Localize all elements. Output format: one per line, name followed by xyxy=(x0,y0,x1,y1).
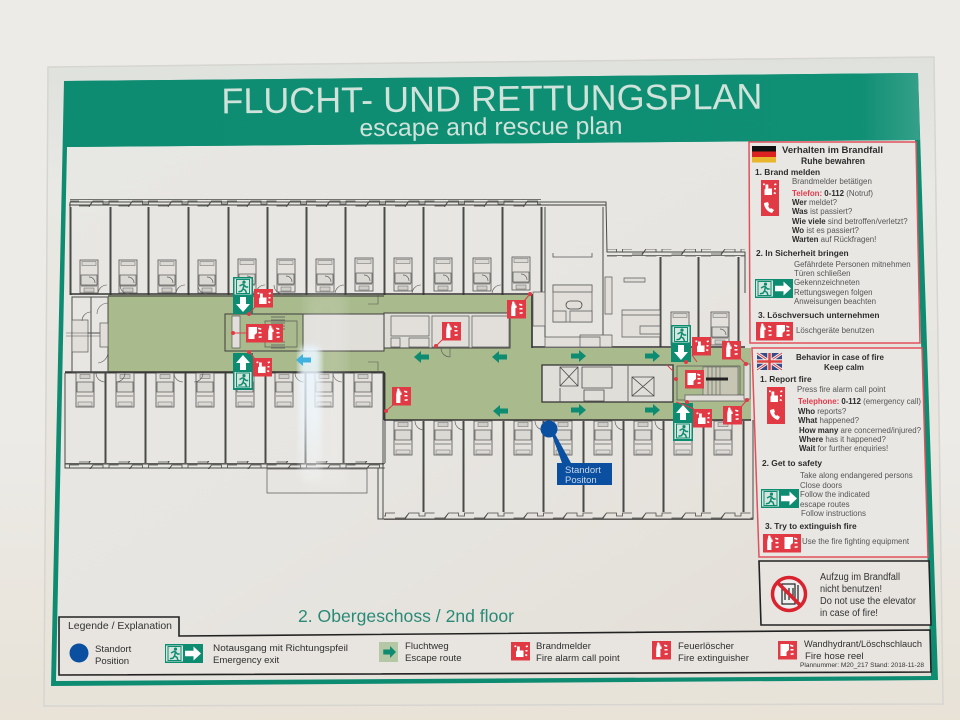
panel: English fire instructions xyxy=(752,348,928,557)
item: extinguisher: Feuerlöscher xyxy=(678,641,735,652)
step 2 xyxy=(755,248,911,306)
English heading: Behavior in case of fire xyxy=(796,352,884,362)
item: position xyxy=(70,644,132,667)
door swings xyxy=(96,285,664,430)
step 1: Wait for further enquiries! xyxy=(799,444,888,453)
subtitle: escape and rescue plan xyxy=(359,113,623,142)
item: hose reel: Wandhydrant/Löschschlauch xyxy=(804,639,922,650)
step 1: Where has it happened? xyxy=(799,435,886,444)
step 2: Close doors xyxy=(800,481,842,490)
step 1: Warten auf Rückfragen! xyxy=(792,235,876,244)
step 2: Take along endangered persons xyxy=(800,471,913,480)
item: hose reel xyxy=(778,639,922,662)
step 1: Telephone: 0-112 (emergency call) xyxy=(798,397,921,406)
walls: upper rooms xyxy=(70,202,745,293)
item: fire alarm: Fire alarm call point xyxy=(536,653,620,664)
icon: UK flag xyxy=(757,353,782,370)
item: escape route: Fluchtweg xyxy=(405,641,449,652)
step 1: Brandmelder betätigen xyxy=(792,177,872,186)
elevator warning text: Do not use the elevator xyxy=(820,596,917,607)
item: extinguisher xyxy=(652,641,750,664)
step 1: Wo ist es passiert? xyxy=(792,226,860,235)
elevator warning text: Aufzug im Brandfall xyxy=(820,572,900,583)
current position marker: Standort xyxy=(565,465,601,476)
step 2: Gekennzeichneten xyxy=(794,278,860,287)
header band xyxy=(64,73,920,147)
step 1: Was ist passiert? xyxy=(792,207,853,216)
step 1: Wie viele sind betroffen/verletzt? xyxy=(792,217,908,226)
German heading xyxy=(782,145,883,166)
corridor xyxy=(108,295,673,420)
legend tab title: Legende / Explanation xyxy=(68,621,172,632)
step 2: Gefährdete Personen mitnehmen xyxy=(794,260,911,269)
step 3: 3. Try to extinguish fire xyxy=(765,521,857,531)
German heading: Verhalten im Brandfall xyxy=(782,145,883,155)
step 2: 2. Get to safety xyxy=(762,458,822,468)
step 1: 1. Brand melden xyxy=(755,167,820,177)
floor label: 2. Obergeschoss / 2nd floor xyxy=(298,606,514,626)
elevator warning text: in case of fire! xyxy=(820,608,878,619)
step 2: escape routes xyxy=(800,500,850,509)
item: emergency exit: Notausgang mit Richtungspfeil xyxy=(213,643,348,654)
item: position: Standort xyxy=(95,644,132,655)
step 2: 2. In Sicherheit bringen xyxy=(756,248,849,258)
step 1 xyxy=(755,167,908,244)
icon: German flag xyxy=(752,146,776,162)
balcony outline xyxy=(267,469,367,493)
left end stair and bath xyxy=(66,297,108,372)
English heading xyxy=(796,352,884,372)
item: escape route: Escape route xyxy=(405,653,462,664)
item: escape route xyxy=(379,641,462,664)
step 3: 3. Löschversuch unternehmen xyxy=(758,310,879,320)
beds: lower rooms xyxy=(76,373,732,455)
panel: elevator warning xyxy=(759,561,931,625)
current position marker: Positon xyxy=(565,475,597,486)
elevator warning text: nicht benutzen! xyxy=(820,584,882,595)
English heading: Keep calm xyxy=(824,362,864,372)
walls: lower rooms xyxy=(65,373,384,468)
elevator warning text xyxy=(820,572,917,619)
German heading: Ruhe bewahren xyxy=(801,156,865,166)
step 2: Anweisungen beachten xyxy=(794,297,876,306)
step 1: Wer meldet? xyxy=(792,198,838,207)
escape route arrows xyxy=(414,350,660,417)
step 1: Who reports? xyxy=(798,407,847,416)
green frame xyxy=(51,73,938,686)
icon: no elevator xyxy=(772,578,806,610)
step 1: 1. Report fire xyxy=(760,374,812,384)
step 2: Follow instructions xyxy=(801,509,866,518)
item: extinguisher: Fire extinguisher xyxy=(678,653,750,664)
red safety signs and their location dots xyxy=(231,289,749,428)
glare reflection xyxy=(296,292,346,487)
step 3 xyxy=(756,310,879,340)
step 1 xyxy=(760,374,922,453)
white plan sheet xyxy=(56,140,931,681)
plan number: Plannummer: M20_217 Stand: 2018-11-28 xyxy=(800,663,925,669)
step 1: Telefon: 0-112 (Notruf) xyxy=(792,189,873,198)
step 1: What happened? xyxy=(798,416,860,425)
step 1: How many are concerned/injured? xyxy=(799,426,922,435)
step 1: Press fire alarm call point xyxy=(797,385,886,394)
legend xyxy=(59,617,931,675)
item: fire alarm: Brandmelder xyxy=(536,641,592,652)
item: hose reel: Fire hose reel xyxy=(805,651,864,662)
step 2 xyxy=(761,458,913,518)
panel: German fire instructions xyxy=(749,142,920,343)
emergency exit signs xyxy=(233,277,693,441)
beds: upper rooms xyxy=(80,257,729,345)
title: FLUCHT- UND RETTUNGSPLAN xyxy=(221,76,763,121)
floor plan xyxy=(65,199,753,520)
step 2: Rettungswegen folgen xyxy=(794,288,873,297)
step 3: Löschgeräte benutzen xyxy=(796,326,874,335)
item: position: Position xyxy=(95,656,129,667)
step 3 xyxy=(763,521,910,552)
item: emergency exit xyxy=(165,643,348,666)
suite bathtub and furniture xyxy=(533,253,660,347)
central core rooms xyxy=(225,313,750,402)
step 3: Use the fire fighting equipment xyxy=(802,537,910,546)
item: emergency exit: Emergency exit xyxy=(213,655,279,666)
current position marker xyxy=(540,420,612,486)
step 2: Türen schließen xyxy=(794,269,851,278)
step 2: Follow the indicated xyxy=(800,490,870,499)
item: fire alarm xyxy=(511,641,620,664)
